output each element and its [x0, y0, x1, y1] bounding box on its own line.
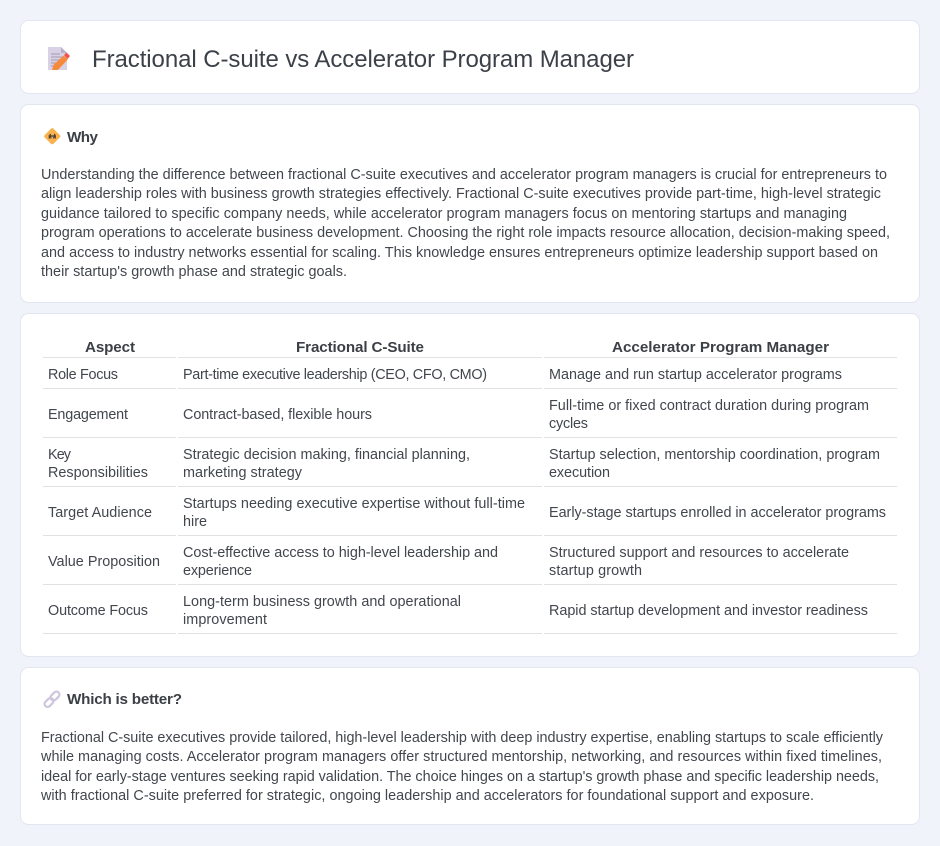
- title text: Fractional C-suite vs Accelerator Program Manager: [92, 46, 634, 73]
- row: engagement: Full-time or fixed contract duration during program: [549, 398, 869, 414]
- row: outcome focus: improvement: [183, 612, 267, 628]
- row: value proposition: startup growth: [549, 563, 642, 579]
- row: value proposition: experience: [183, 563, 252, 579]
- table header row: Accelerator Program Manager: [612, 339, 829, 356]
- icon: chain link: [43, 690, 61, 708]
- row: outcome focus: Outcome Focus: [48, 603, 148, 619]
- row: target audience: [43, 496, 897, 536]
- row: value proposition: Structured support and resources to accelerate: [549, 545, 849, 561]
- row: value proposition: Cost-effective access to high-level leadership and: [183, 545, 498, 561]
- which is better paragraph: ideal for early-stage ventures seeking rapid validation. The choice hinges on a startup's growth phase and specific leadership needs,: [41, 769, 879, 785]
- row: outcome focus: [43, 594, 897, 634]
- row: key responsibilities: Strategic decision making, financial planning,: [183, 447, 470, 463]
- icon: document with pencil: [48, 47, 70, 70]
- row: engagement: [43, 398, 897, 438]
- why paragraph: Understanding the difference between fractional C-suite executives and accelerator program managers is crucial for entrepreneurs to: [41, 167, 887, 183]
- table header row: Fractional C-Suite: [296, 339, 424, 356]
- row: target audience: Target Audience: [48, 505, 152, 521]
- why paragraph: and access to industry networks essential for scaling. This knowledge ensures entrepreneurs optimize leadership support based on: [41, 245, 878, 261]
- why paragraph: guidance tailored to specific company needs, while accelerator program managers focus on mentoring startups and managing: [41, 206, 847, 222]
- table header row: Aspect: [85, 339, 135, 356]
- row: role focus: [43, 367, 897, 389]
- row: value proposition: Value Proposition: [48, 554, 160, 570]
- row: key responsibilities: execution: [549, 465, 610, 481]
- row: target audience: hire: [183, 514, 207, 530]
- panel: comparison table: [20, 314, 920, 656]
- heading: why: Why: [67, 129, 99, 146]
- table header row: [43, 339, 897, 358]
- row: key responsibilities: Key: [48, 447, 72, 463]
- panel: why: [20, 104, 920, 302]
- row: outcome focus: Long-term business growth and operational: [183, 594, 461, 610]
- row: engagement: Engagement: [48, 407, 128, 423]
- why paragraph: their startup's growth phase and strategic goals.: [41, 264, 347, 280]
- row: role focus: Manage and run startup accelerator programs: [549, 367, 842, 383]
- which is better paragraph: [40, 730, 884, 804]
- row: key responsibilities: marketing strategy: [183, 465, 303, 481]
- row: target audience: Early-stage startups enrolled in accelerator programs: [549, 505, 886, 521]
- why paragraph: align leadership roles with business growth strategies effectively. Fractional C-suite executives provide part-time, high-level strategic: [41, 186, 881, 202]
- row: role focus: Part-time executive leadership (CEO, CFO, CMO): [183, 367, 487, 383]
- row: target audience: Startups needing executive expertise without full-time: [183, 496, 525, 512]
- row: value proposition: [43, 545, 897, 585]
- row: key responsibilities: [43, 447, 897, 487]
- panel: which is better: [20, 668, 920, 824]
- why paragraph: [41, 167, 890, 280]
- which is better paragraph: while managing costs. Accelerator program managers offer structured mentorship, networking, and resources within fixed timelines,: [40, 749, 882, 765]
- row: engagement: Contract-based, flexible hours: [183, 407, 372, 423]
- row: engagement: cycles: [549, 416, 588, 432]
- icon: diamond warning sign: [43, 127, 61, 145]
- row: role focus: Role Focus: [48, 367, 118, 383]
- row: outcome focus: Rapid startup development and investor readiness: [549, 603, 868, 619]
- row: key responsibilities: Responsibilities: [48, 465, 148, 481]
- panel: title: [20, 20, 920, 94]
- which is better paragraph: Fractional C-suite executives provide tailored, high-level leadership with deep industry expertise, enabling startups to scale efficiently: [41, 730, 884, 746]
- which is better paragraph: with fractional C-suite preferred for strategic, ongoing leadership and accelerators for foundational support and exposure.: [40, 788, 814, 804]
- why paragraph: program operations to accelerate business development. Choosing the right role impacts resource allocation, decision-making speed,: [41, 225, 890, 241]
- heading: which is better: Which is better?: [67, 691, 182, 708]
- row: key responsibilities: Startup selection, mentorship coordination, program: [549, 447, 880, 463]
